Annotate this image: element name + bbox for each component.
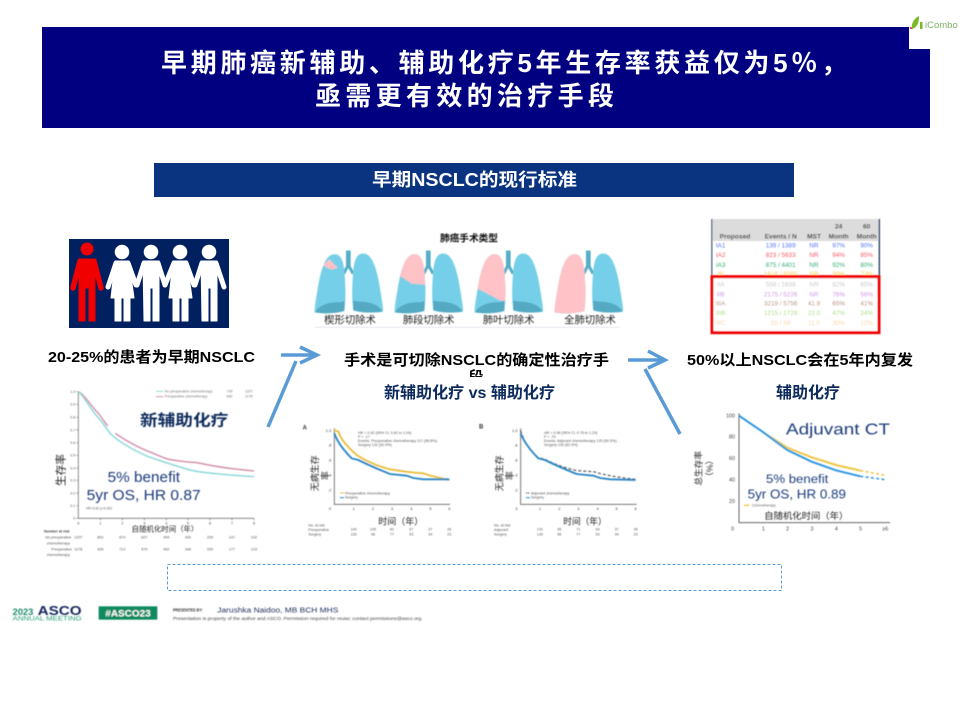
table rows: 30%: [832, 320, 845, 327]
panel A: P = .17: [358, 435, 370, 439]
table header: 60: [863, 223, 871, 230]
panel B: 54: [596, 528, 600, 532]
panel A: 77: [390, 532, 394, 536]
x ticks: 3: [811, 527, 814, 533]
panel B: 34: [615, 532, 619, 536]
table rows: 82%: [832, 281, 845, 288]
ASCO meeting logo: ANNUAL MEETING: [13, 615, 82, 622]
title text: 亟需更有效的治疗手段: [315, 81, 614, 111]
table rows: IA2: [716, 252, 726, 259]
panel A: Events: Preoperative chemotherapy 117 (58.8%);: [358, 439, 438, 443]
table rows: 73%: [860, 271, 873, 278]
panel B: 53: [596, 532, 600, 536]
panel A: 81: [390, 528, 394, 532]
y ticks: 20: [729, 499, 735, 505]
panel A: 26: [447, 528, 451, 532]
table rows: NR: [809, 291, 819, 298]
chart: adjuvant overall survival: [692, 413, 890, 533]
number at risk: 579: [141, 547, 147, 551]
table rows: NR: [809, 243, 819, 250]
axis tick labels: 1.0: [70, 390, 75, 394]
hashtag badge: [99, 606, 157, 620]
presenter text: Presentation is property of the author and ASCO. Permission required for reuse; contact permissions@asco.org.: [173, 616, 423, 621]
number at risk: chemotherapy: [47, 553, 70, 557]
chart: neoadjuvant survival curves: 2: [121, 520, 124, 525]
legend: No preoperative chemotherapy: [165, 389, 213, 393]
panel B: 1.0: [512, 428, 518, 433]
y axis label: [692, 451, 715, 486]
number at risk: 177: [229, 547, 235, 551]
panel A: 140: [351, 528, 357, 532]
curves and axes: [76, 392, 254, 520]
red highlight box: [712, 277, 879, 333]
hashtag badge: #ASCO23: [105, 609, 151, 619]
lung: pneumonectomy: [555, 250, 623, 313]
panel A: 34: [428, 532, 432, 536]
panel B: 时间（年）: [563, 516, 607, 527]
table header: Events / N: [765, 233, 797, 240]
heading: adjuvant: 辅助化疗: [776, 383, 840, 402]
panel B: [479, 425, 638, 536]
panel B: 71: [576, 528, 580, 532]
axis tick labels: 0.5: [70, 454, 75, 458]
panel A: .4: [328, 472, 332, 477]
panel A: [303, 425, 451, 536]
number at risk: 123: [251, 547, 257, 551]
panel A: 1: [353, 506, 356, 511]
title text: [161, 48, 847, 111]
panel B: 4: [597, 506, 600, 511]
number at risk: 527: [141, 536, 147, 540]
text: middle statement: 段: [468, 368, 484, 386]
axis tick labels: 0.7: [70, 428, 75, 432]
table rows: IB: [718, 271, 724, 278]
number at risk: 1207: [74, 536, 82, 540]
table rows: 41.9: [808, 301, 821, 308]
chart: neoadjuvant survival curves: 8: [253, 520, 256, 525]
table rows: 24%: [860, 310, 873, 317]
benefit text: [87, 470, 201, 504]
table rows: 47%: [832, 310, 845, 317]
icon: white people: [108, 245, 224, 321]
panel A: 105: [370, 528, 376, 532]
table rows: IA1: [716, 243, 726, 250]
title banner: [42, 20, 933, 128]
text: right statement: 50%以上NSCLC会在5年内复发: [687, 351, 913, 369]
x ticks: [731, 527, 888, 533]
chart: neoadjuvant survival curves: 6: [209, 520, 212, 525]
table rows: 11.0: [808, 320, 820, 327]
panel A: 4: [410, 506, 413, 511]
legend: 682: [227, 395, 233, 399]
panel A: A: [303, 425, 308, 431]
icon: red person: [73, 242, 101, 321]
table rows: IIA: [717, 281, 725, 288]
panel B: 26: [634, 528, 638, 532]
logo: iCombo: [910, 16, 958, 31]
panel B: .4: [514, 472, 518, 477]
panel A: Surgery: [345, 496, 358, 500]
panel B: 77: [576, 532, 580, 536]
number at risk: 300: [185, 536, 191, 540]
number at risk: 147: [229, 536, 235, 540]
table rows: 823 / 5633: [766, 252, 796, 259]
table rows: NR: [809, 281, 819, 288]
panel B: Events: Adjuvant chemotherapy 125 (59.5%);: [544, 439, 617, 443]
panel A: .6: [328, 457, 332, 462]
table header: Proposed: [720, 233, 750, 240]
table rows: 1618 / 6095: [764, 271, 798, 278]
x ticks: 0: [731, 527, 734, 533]
axis tick labels: 0.9: [70, 403, 75, 407]
ASCO meeting logo: [13, 603, 82, 622]
table rows: 80%: [860, 262, 873, 269]
panel B: .8: [514, 443, 518, 448]
panel B: HR = 0.96 (95% CI, 0.75 to 1.23): [544, 431, 597, 435]
y ticks: 100: [726, 413, 735, 419]
table header: 24: [835, 223, 843, 230]
number at risk: 674: [119, 536, 125, 540]
table rows: IIIA: [716, 301, 726, 308]
y axis label: 生存率: [55, 454, 68, 486]
table rows: NR: [809, 271, 819, 278]
presenter text: PRESENTED BY:: [173, 608, 203, 613]
number at risk: 1178: [74, 547, 82, 551]
y ticks: 80: [729, 435, 735, 441]
panel B: 1: [539, 506, 542, 511]
y axis label: 总生存率: [692, 451, 703, 486]
legend: Preoperative chemotherapy: [165, 395, 208, 399]
lung labels: 肺叶切除术: [483, 314, 534, 327]
legend: 745: [227, 389, 233, 393]
table rows: 89%: [832, 271, 845, 278]
panel A: 时间（年）: [378, 516, 423, 527]
staging survival table: [711, 219, 880, 333]
table rows: IA3: [716, 262, 726, 269]
panel B: 95: [557, 528, 561, 532]
panel A: 98: [371, 532, 375, 536]
footer: [13, 603, 423, 622]
presenter text: [173, 607, 423, 621]
panel A: Preoperative: [308, 528, 329, 532]
table rows: NR: [809, 262, 819, 269]
x ticks: 1: [762, 527, 765, 533]
table rows: 3219 / 5756: [764, 301, 798, 308]
legend: [156, 389, 253, 399]
x ticks: 5: [859, 527, 862, 533]
axis tick labels: 0.4: [70, 466, 75, 470]
panel A: HR = 0.92 (95% CI, 0.81 to 1.04): [358, 431, 411, 435]
ASCO meeting logo: ASCO: [38, 603, 82, 618]
panel B: 5: [616, 506, 619, 511]
axis tick labels: 0: [73, 517, 75, 521]
panel A: 率: [320, 471, 331, 480]
chart: neoadjuvant survival curves: [44, 389, 257, 557]
chart: neoadjuvant survival curves: 5: [187, 520, 190, 525]
dashed empty callout box: [168, 564, 782, 590]
chart: neoadjuvant survival curves: 3: [143, 520, 146, 525]
panel A: .8: [328, 443, 332, 448]
table rows: IIB: [717, 291, 725, 298]
table rows: 56%: [860, 291, 873, 298]
table rows: 556 / 1638: [766, 281, 796, 288]
panel A: 6: [448, 506, 451, 511]
lung labels: 肺段切除术: [403, 314, 454, 327]
table rows: 41%: [860, 301, 873, 308]
x axis label: 自随机化时间（年）: [132, 524, 198, 533]
table rows: 139 / 1389: [766, 243, 796, 250]
panel A: 1.0: [326, 428, 332, 433]
panel B: 131: [537, 528, 543, 532]
panel B: Adjuvant: [494, 528, 508, 532]
panel A: 5: [429, 506, 432, 511]
y axis label: （%）: [705, 456, 715, 481]
table header: Month: [857, 233, 877, 240]
legend: Chemotherapy: [752, 504, 776, 508]
table rows: 12%: [860, 320, 873, 327]
table rows: 65%: [860, 281, 873, 288]
table rows: 97%: [832, 243, 845, 250]
panel B: 6: [635, 506, 638, 511]
axis tick labels: 0.6: [70, 441, 75, 445]
panel A: 23: [447, 532, 451, 536]
table rows: NR: [809, 252, 819, 259]
heading: neoadjuvant vs adjuvant: 新辅助化疗 vs 辅助化疗: [384, 383, 555, 402]
panel B: Surgery 132 (62.9%): [544, 443, 578, 447]
table rows: 875 / 4401: [766, 262, 796, 269]
panel A: 无病生存: [309, 455, 320, 491]
lung labels: [324, 314, 616, 327]
axis tick labels: 0.8: [70, 416, 75, 420]
presenter text: Jarushka Naidoo, MB BCH MHS: [217, 607, 339, 614]
table rows: IIIB: [716, 310, 725, 317]
panel B: 率: [504, 471, 515, 480]
table rows: 1215 / 1729: [764, 310, 798, 317]
table rows: 65%: [832, 301, 845, 308]
number at risk: 209: [207, 536, 213, 540]
table rows: IIIC: [716, 320, 726, 327]
table rows: [712, 243, 879, 333]
number at risk: 442: [163, 547, 169, 551]
figure title: 肺癌手术类型: [440, 232, 498, 244]
x ticks: ≥6: [882, 527, 888, 533]
table rows: 90%: [860, 243, 873, 250]
table rows: 2175 / 5226: [764, 291, 798, 298]
chart: neoadjuvant survival curves: 1: [99, 520, 102, 525]
number at risk: 102: [251, 536, 257, 540]
panel A: Preoperative chemotherapy: [345, 491, 390, 495]
table rows: 94%: [832, 252, 845, 259]
panel B: 98: [557, 532, 561, 536]
number at risk: Preoperative: [51, 547, 72, 551]
panel B: 130: [537, 532, 543, 536]
x axis label: 自随机化时间（年）: [764, 510, 848, 521]
lung: lobectomy: [473, 245, 543, 313]
table rows: 85%: [860, 252, 873, 259]
panel A: Surgery 132 (62.9%): [358, 443, 392, 447]
arrow: middle to right: [628, 351, 680, 434]
panel B: 0: [516, 506, 519, 511]
chart: neoadjuvant survival curves: 4: [165, 520, 168, 525]
logo: iCombo: iCombo: [925, 20, 958, 31]
title text: 早期肺癌新辅助、辅助化疗5年生存率获益仅为5％，: [161, 48, 847, 78]
x ticks: 4: [835, 527, 838, 533]
chart heading: 新辅助化疗: [140, 411, 228, 429]
number at risk: 409: [163, 536, 169, 540]
lung: segmentectomy: [393, 245, 463, 313]
chart heading: Adjuvant CT: [786, 421, 890, 438]
benefit text: 5yr OS, HR 0.89: [748, 487, 846, 501]
chart: neoadjuvant survival curves: HR=0.82 p=0.002: [86, 507, 112, 511]
table rows: 76%: [832, 291, 845, 298]
legend: 1178: [245, 395, 253, 399]
axis tick labels: 0.3: [70, 479, 75, 483]
panel B: P = .74: [544, 435, 556, 439]
y ticks: 60: [729, 456, 735, 462]
section heading bar: 早期NSCLC的现行标准: [372, 170, 577, 190]
table header: MST: [807, 233, 821, 240]
table rows: 92%: [832, 262, 845, 269]
x ticks: 2: [786, 527, 789, 533]
benefit text: 5yr OS, HR 0.87: [87, 488, 201, 504]
chart: neoadjuvant survival curves: 7: [231, 520, 234, 525]
lung labels: 全肺切除术: [564, 314, 616, 327]
chart: neoadjuvant survival curves: 0: [77, 520, 80, 525]
panel B: No. at risk: [494, 523, 511, 527]
benefit text: [748, 472, 846, 501]
number at risk: 893: [97, 536, 103, 540]
ASCO meeting logo: 2023: [13, 607, 33, 617]
panel A: Surgery: [308, 532, 321, 536]
number at risk: 253: [207, 547, 213, 551]
panel A: 3: [391, 506, 394, 511]
y ticks: 40: [729, 478, 735, 484]
number at risk: No preoperative: [45, 536, 71, 540]
text: middle statement: [344, 351, 609, 405]
table header: [720, 223, 877, 240]
table header: Month: [829, 233, 849, 240]
panel B: 23: [634, 532, 638, 536]
icon: five people, one highlighted: [69, 239, 229, 328]
number at risk: [44, 530, 257, 557]
axis tick labels: 0.1: [70, 504, 75, 508]
axis tick labels: [70, 390, 75, 521]
panel B: .2: [514, 487, 518, 492]
panel A: .2: [328, 487, 332, 492]
panel B: 3: [577, 506, 580, 511]
panel B: 2: [558, 506, 561, 511]
panel A: 2: [372, 506, 375, 511]
panel A: 37: [428, 528, 432, 532]
panel B: 37: [615, 528, 619, 532]
curves and axes: [739, 413, 890, 523]
text: left statement: 20-25%的患者为早期NSCLC: [48, 348, 255, 366]
legend: 1207: [245, 389, 253, 393]
benefit text: 5% benefit: [108, 470, 180, 486]
text: middle statement: 手术是可切除NSCLC的确定性治疗手: [344, 351, 609, 369]
panel B: Surgery: [531, 496, 544, 500]
arrow: left chart to middle: [268, 347, 317, 427]
number at risk: chemotherapy: [47, 542, 70, 546]
number at risk: 928: [97, 547, 103, 551]
panel B: B: [479, 425, 484, 431]
panel B: Surgery: [494, 532, 507, 536]
chart: panels A and B disease-free survival: [303, 425, 638, 536]
panel A: 0: [329, 506, 332, 511]
panel B: 无病生存: [493, 455, 504, 491]
number at risk: 712: [119, 547, 125, 551]
panel A: 53: [409, 532, 413, 536]
section heading bar: [154, 163, 794, 197]
axis tick labels: 0.2: [70, 491, 75, 495]
lung labels: 楔形切除术: [324, 314, 376, 327]
panel A: No. at risk: [308, 523, 325, 527]
table rows: 55 / 69: [771, 320, 791, 327]
lung: wedge resection: [315, 250, 383, 313]
y ticks: [726, 413, 735, 505]
panel B: Adjuvant chemotherapy: [531, 491, 570, 495]
number at risk: 346: [185, 547, 191, 551]
lung surgery types figure: [315, 232, 623, 327]
table rows: 22.0: [808, 310, 821, 317]
panel B: .6: [514, 457, 518, 462]
panel A: 57: [409, 528, 413, 532]
benefit text: 5% benefit: [766, 472, 829, 486]
panel A: 130: [351, 532, 357, 536]
number at risk: Number at risk: [44, 530, 71, 534]
